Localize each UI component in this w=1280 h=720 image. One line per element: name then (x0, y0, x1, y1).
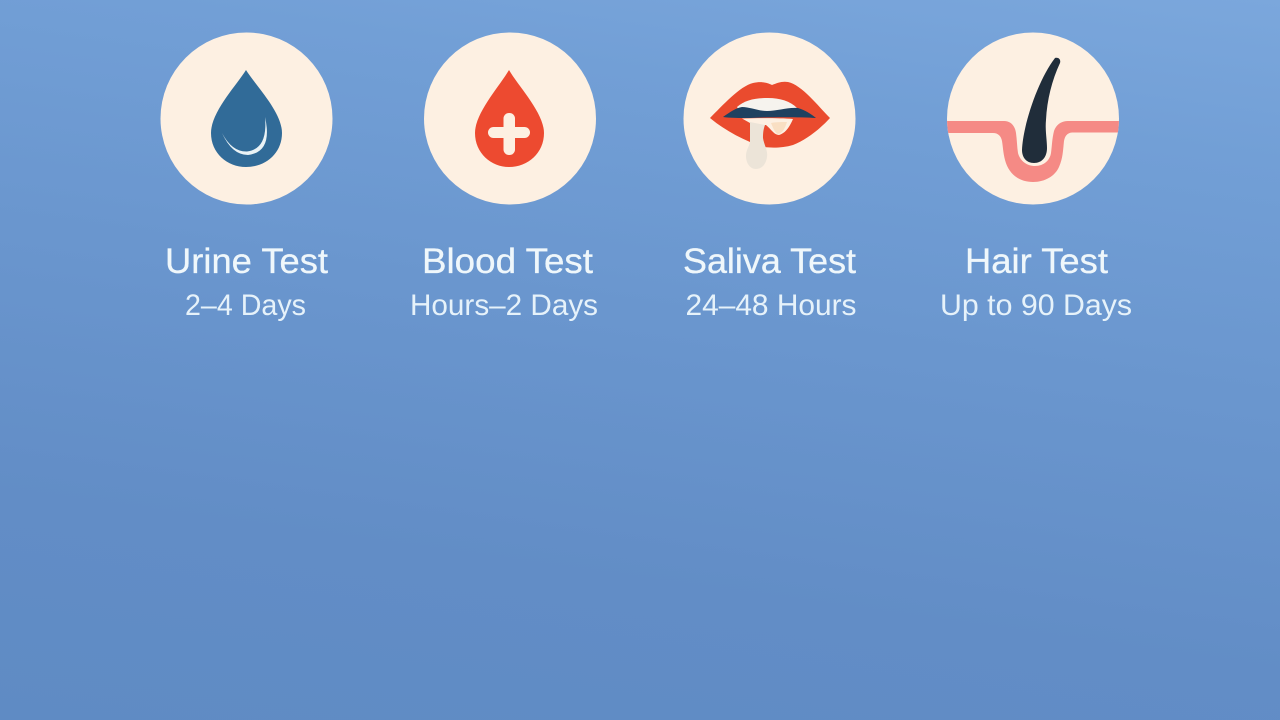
icon: hair follicle (945, 32, 1122, 204)
icon: lips with saliva (684, 32, 856, 204)
icon: urine drop (160, 32, 332, 204)
heading: hair test: Hair Test (965, 242, 1108, 281)
panel: blood test (410, 32, 598, 322)
text: saliva window: 24–48 Hours (686, 289, 856, 322)
text: blood window: Hours–2 Days (410, 289, 598, 322)
text: hair window: Up to 90 Days (940, 289, 1132, 322)
text: urine window: 2–4 Days (185, 289, 306, 322)
heading: blood test: Blood Test (422, 242, 593, 281)
panel: urine test (160, 32, 332, 322)
heading: urine test: Urine Test (165, 242, 328, 281)
panel: saliva test (683, 32, 856, 322)
icon: blood drop with cross (424, 32, 596, 204)
heading: saliva test: Saliva Test (683, 242, 856, 281)
panel: hair test (940, 32, 1132, 322)
